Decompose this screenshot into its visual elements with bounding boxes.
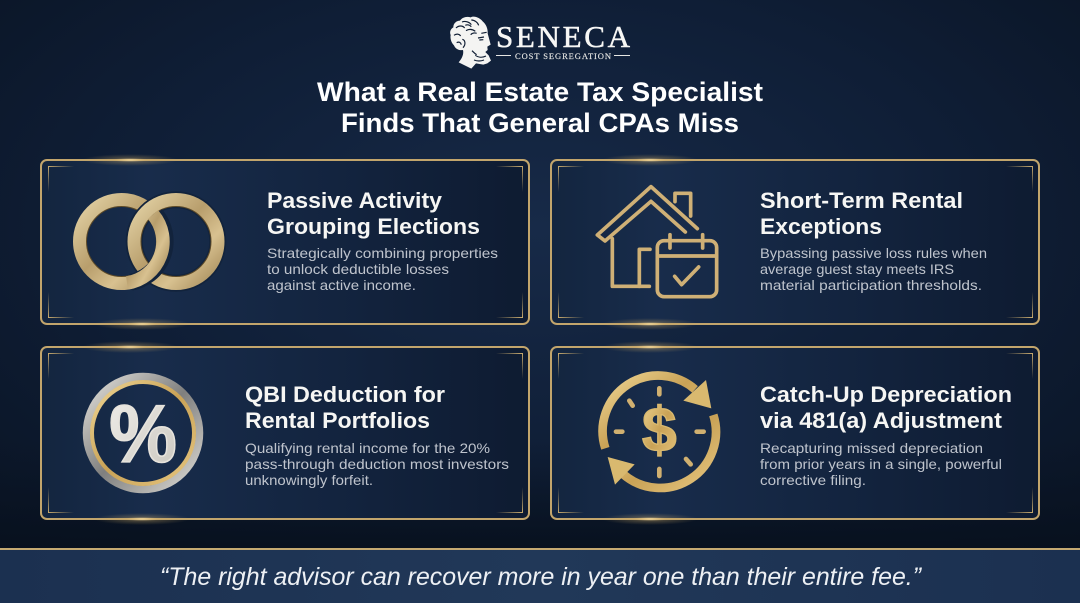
title: What a Real Estate Tax Specialist [317, 77, 763, 107]
quote: “The right advisor can recover more in year one than their entire fee.” [160, 563, 923, 591]
body text: pass-through deduction most investors [245, 456, 509, 472]
icon: circular arrows around dollar sign: $ [642, 396, 677, 466]
body text: material participation thresholds. [760, 277, 982, 293]
panel: short-term rental exceptions [551, 154, 1039, 330]
panel: QBI deduction for rental portfolios [41, 341, 529, 525]
icon: circular arrows around dollar sign [603, 376, 716, 488]
body text: Bypassing passive loss rules when [760, 245, 987, 261]
body text: to unlock deductible losses [267, 261, 449, 277]
body text: Qualifying rental income for the 20% [245, 440, 490, 456]
heading: QBI Deduction for [245, 382, 445, 407]
body text [760, 440, 1002, 488]
body text [760, 245, 987, 293]
panel: short-term rental exceptions: Exceptions [760, 214, 882, 239]
body text: corrective filing. [760, 472, 866, 488]
tagline: COST SEGREGATION [515, 51, 611, 61]
body text: unknowingly forfeit. [245, 472, 373, 488]
icon: percent medallion [86, 376, 200, 490]
icon: philosopher head [450, 17, 491, 69]
panel: passive activity grouping elections: Grouping Elections [267, 214, 480, 239]
heading: Passive Activity [267, 188, 442, 213]
body text: Strategically combining properties [267, 245, 498, 261]
body text: Recapturing missed depreciation [760, 440, 983, 456]
body text [245, 440, 509, 488]
heading: Catch-Up Depreciation [760, 382, 1012, 407]
panel: passive activity grouping elections [41, 154, 529, 330]
panel: catch-up depreciation via 481(a) adjustment: via 481(a) Adjustment [760, 408, 1003, 433]
body text: average guest stay meets IRS [760, 261, 954, 277]
title [317, 77, 763, 138]
logo: Seneca Cost Segregation [450, 17, 631, 69]
icon: percent medallion: % [109, 387, 177, 480]
body text: from prior years in a single, powerful [760, 456, 1002, 472]
panel: QBI deduction for rental portfolios: Rental Portfolios [245, 408, 430, 433]
wordmark: SENECA [496, 19, 631, 54]
heading: Short-Term Rental [760, 188, 963, 213]
body text [267, 245, 498, 293]
panel: catch-up depreciation via 481(a) adjustment [551, 341, 1039, 525]
footer quote band [0, 548, 1080, 603]
title: Finds That General CPAs Miss [341, 108, 739, 138]
icon: house with calendar [597, 187, 717, 297]
icon: interlocking gold rings [80, 200, 218, 283]
body text: against active income. [267, 277, 416, 293]
